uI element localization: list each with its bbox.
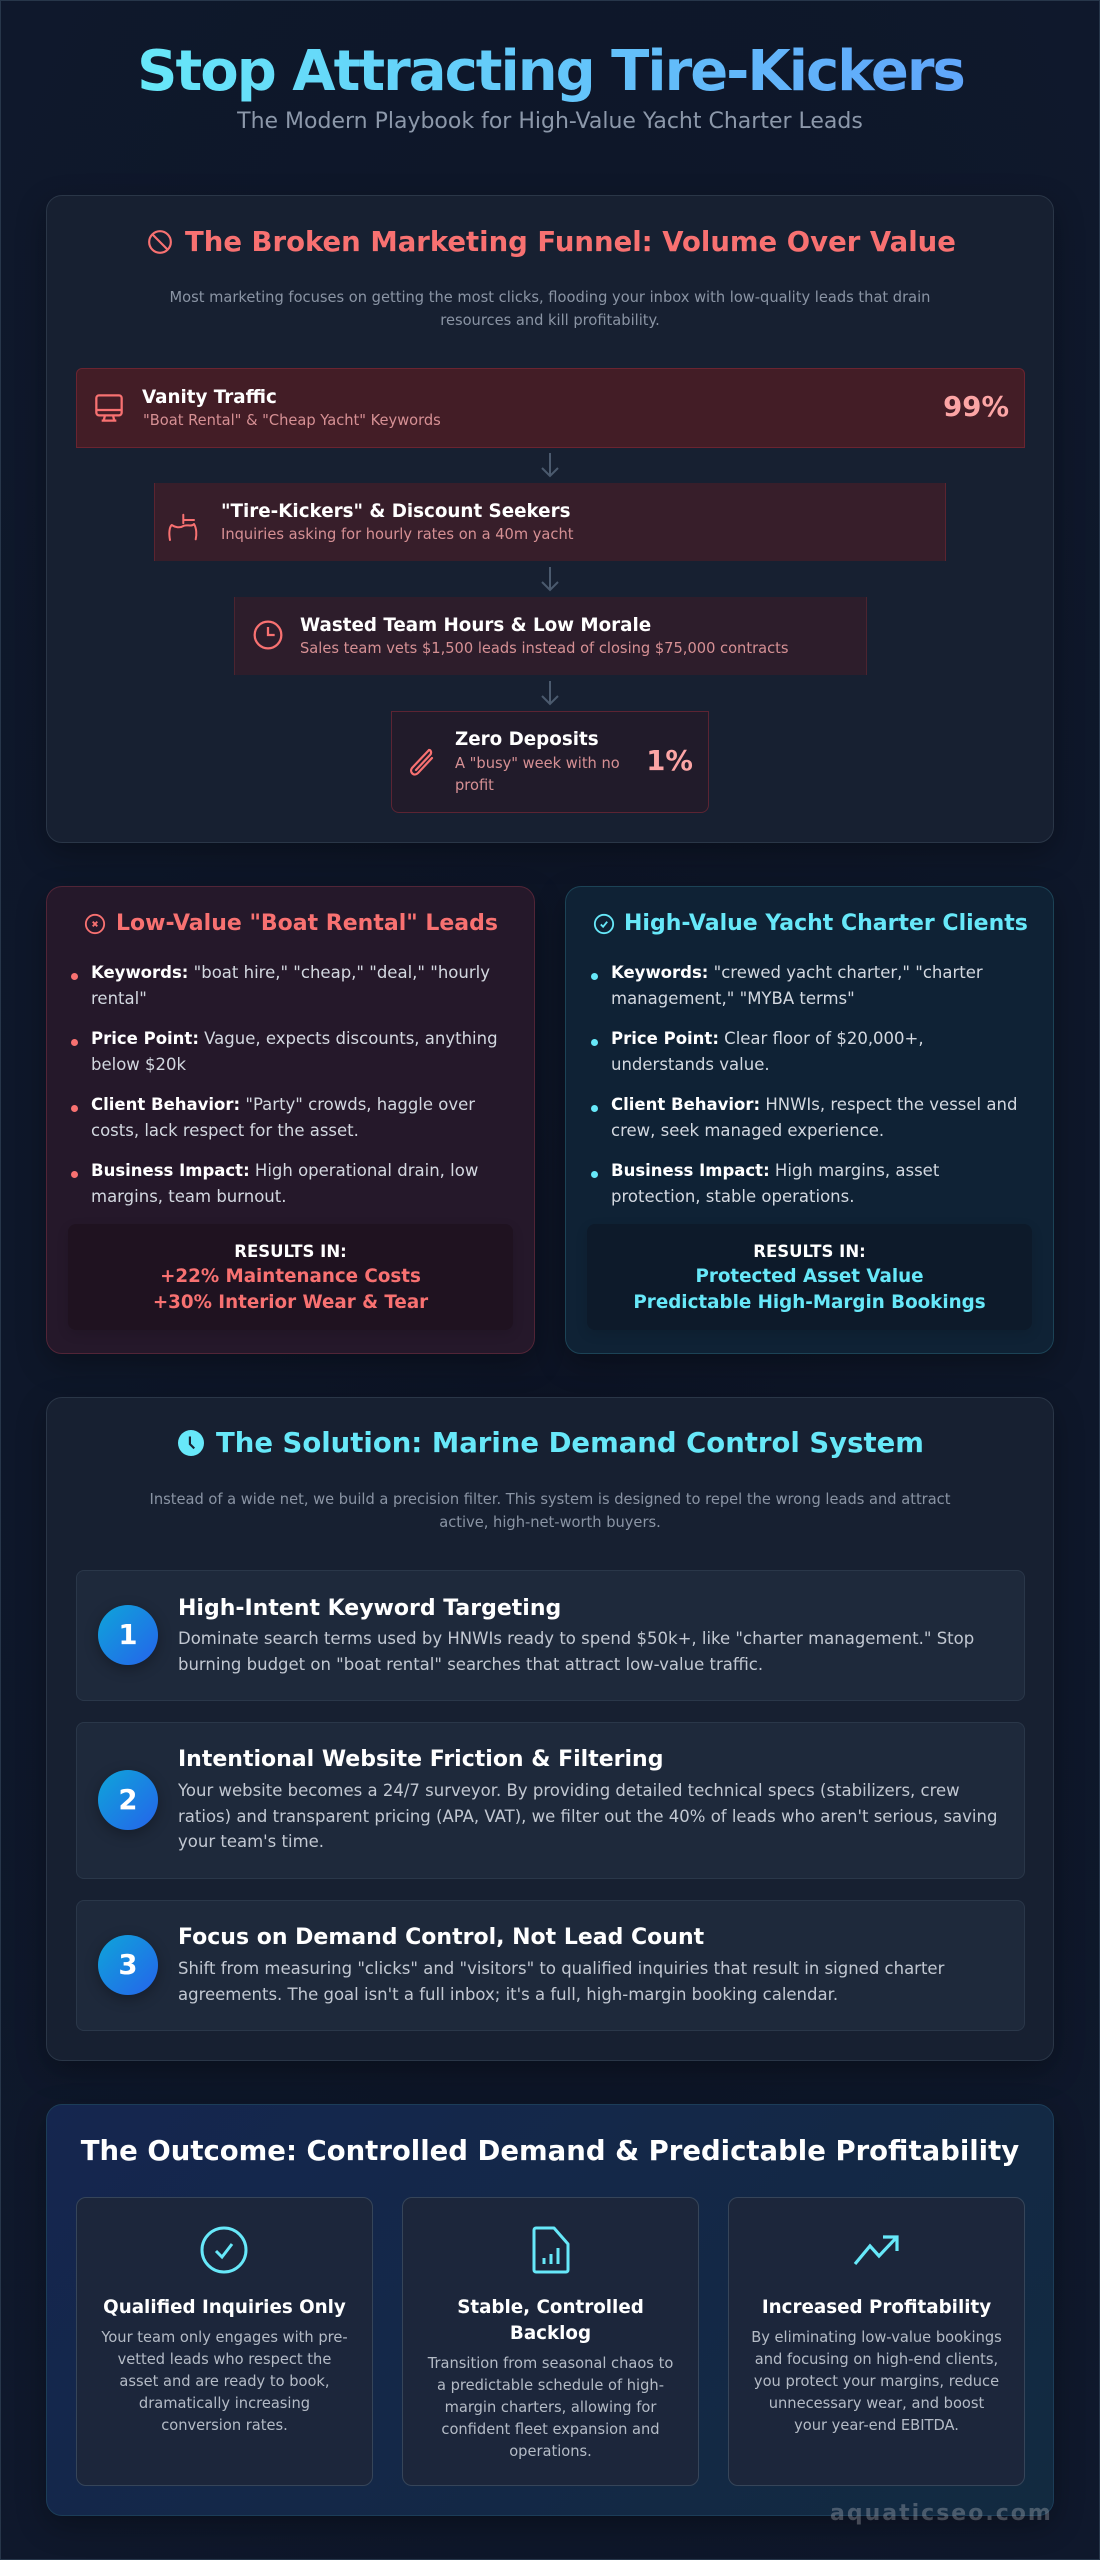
card body: conversion rates. bbox=[161, 2417, 288, 2434]
stage title: Wasted Team Hours & Low Morale bbox=[300, 615, 651, 636]
stage subtitle bbox=[455, 755, 620, 794]
item: keywords: rental" bbox=[91, 989, 147, 1008]
item: keywords bbox=[91, 963, 490, 1008]
item: keywords: Keywords: "boat hire," "cheap," "deal," "hourly bbox=[91, 963, 490, 982]
results values: +30% Interior Wear & Tear bbox=[153, 1292, 428, 1313]
stage subtitle: "Boat Rental" & "Cheap Yacht" Keywords bbox=[143, 412, 441, 429]
item: keywords: management," "MYBA terms" bbox=[611, 989, 855, 1008]
step 2 bbox=[76, 1722, 1025, 1879]
icon: trending up bbox=[854, 2235, 899, 2265]
stage metric: 1% bbox=[646, 745, 693, 777]
description: funnel bbox=[170, 289, 930, 328]
results label: RESULTS IN: bbox=[753, 1242, 866, 1261]
description: funnel: resources and kill profitability. bbox=[440, 312, 660, 328]
item: price point: below $20k bbox=[91, 1055, 186, 1074]
results box: low-value bbox=[68, 1224, 513, 1330]
card body: dramatically increasing bbox=[139, 2395, 310, 2412]
stage subtitle: Sales team vets $1,500 leads instead of closing $75,000 contracts bbox=[300, 640, 788, 657]
heading: low-value: Low-Value "Boat Rental" Leads bbox=[116, 911, 498, 936]
step 1 bbox=[76, 1570, 1025, 1701]
card body bbox=[428, 2355, 673, 2460]
number badge bbox=[98, 1770, 158, 1830]
number badge: 2 bbox=[118, 1784, 138, 1816]
heading: outcome: The Outcome: Controlled Demand & Predictable Profitability bbox=[81, 2135, 1019, 2167]
icon: monitor bbox=[95, 394, 123, 422]
icon: check circle bbox=[594, 914, 614, 934]
step body: burning budget on "boat rental" searches that attract low-value traffic. bbox=[178, 1655, 763, 1674]
stage title: Vanity Traffic bbox=[142, 387, 277, 408]
item: business impact bbox=[611, 1161, 939, 1206]
number badge bbox=[98, 1935, 158, 1995]
card title: Qualified Inquiries Only bbox=[103, 2297, 346, 2318]
bullet bbox=[591, 1105, 598, 1112]
stage title: Zero Deposits bbox=[455, 729, 599, 750]
card body: Transition from seasonal chaos to bbox=[428, 2355, 673, 2372]
step body bbox=[178, 1781, 997, 1851]
step body: Your website becomes a 24/7 surveyor. By providing detailed technical specs (stabilizers, crew bbox=[178, 1781, 960, 1800]
results values: +22% Maintenance Costs bbox=[160, 1266, 421, 1287]
card title: Backlog bbox=[510, 2323, 591, 2344]
item: keywords: Keywords: "crewed yacht charter," "charter bbox=[611, 963, 983, 982]
card body: margin charters, allowing for bbox=[445, 2399, 656, 2416]
step 3 bbox=[76, 1900, 1025, 2031]
icon: faucet bbox=[168, 514, 198, 541]
item: price point: understands value. bbox=[611, 1055, 770, 1074]
card body: operations. bbox=[509, 2443, 592, 2460]
heading: high-value: High-Value Yacht Charter Clients bbox=[624, 911, 1028, 936]
bullet bbox=[71, 1105, 78, 1112]
stage subtitle: A "busy" week with no bbox=[455, 755, 620, 772]
item: business impact bbox=[91, 1161, 478, 1206]
arrow bbox=[541, 567, 559, 592]
item: business impact: margins, team burnout. bbox=[91, 1187, 286, 1206]
item: client behavior bbox=[611, 1095, 1017, 1140]
funnel stage 2: tire-kickers bbox=[154, 483, 946, 561]
bullet bbox=[71, 1171, 78, 1178]
icon: ban bbox=[148, 230, 172, 254]
panel: high-value clients bbox=[565, 886, 1054, 1354]
card title bbox=[457, 2297, 644, 2344]
card body bbox=[101, 2329, 348, 2434]
stage subtitle: Inquiries asking for hourly rates on a 40m yacht bbox=[221, 526, 573, 543]
results label: RESULTS IN: bbox=[234, 1242, 347, 1261]
subtitle: The Modern Playbook for High-Value Yacht Charter Leads bbox=[237, 109, 863, 134]
item: price point: Price Point: Clear floor of $20,000+, bbox=[611, 1029, 924, 1048]
panel: low-value leads bbox=[46, 886, 535, 1354]
step body: agreements. The goal isn't a full inbox; it's a full, high-margin booking calendar. bbox=[178, 1985, 838, 2004]
icon: check circle bbox=[200, 2226, 248, 2274]
results values bbox=[153, 1266, 428, 1313]
panel: outcome bbox=[46, 2104, 1054, 2516]
card body bbox=[751, 2329, 1002, 2434]
item: client behavior: Client Behavior: "Party" crowds, haggle over bbox=[91, 1095, 475, 1114]
step title: High-Intent Keyword Targeting bbox=[178, 1596, 561, 1621]
card body: Your team only engages with pre- bbox=[101, 2329, 348, 2346]
step body bbox=[178, 1629, 974, 1674]
icon: x circle bbox=[84, 914, 106, 934]
step body bbox=[178, 1959, 944, 2004]
results box: high-value bbox=[587, 1224, 1032, 1330]
icon: paperclip bbox=[410, 748, 434, 776]
number badge: 3 bbox=[118, 1949, 138, 1981]
bullet bbox=[71, 1039, 78, 1046]
watermark: aquaticseo.com bbox=[830, 2501, 1053, 2526]
icon: document chart bbox=[532, 2226, 570, 2274]
arrow bbox=[541, 453, 559, 478]
card body: and focusing on high-end clients, bbox=[755, 2351, 998, 2368]
card body: confident fleet expansion and bbox=[441, 2421, 660, 2438]
item: price point bbox=[91, 1029, 498, 1074]
funnel stage 1: vanity traffic bbox=[76, 368, 1025, 448]
arrow bbox=[541, 681, 559, 706]
bullet bbox=[71, 973, 78, 980]
stage subtitle: profit bbox=[455, 777, 494, 794]
number badge: 1 bbox=[118, 1619, 138, 1651]
stage title: "Tire-Kickers" & Discount Seekers bbox=[221, 501, 570, 522]
description: solution: active, high-net-worth buyers. bbox=[439, 1514, 661, 1530]
item: client behavior bbox=[91, 1095, 476, 1140]
item: business impact: Business Impact: High operational drain, low bbox=[91, 1161, 478, 1180]
step body: Shift from measuring "clicks" and "visitors" to qualified inquiries that result in signed charter bbox=[178, 1959, 944, 1978]
item: price point bbox=[611, 1029, 924, 1074]
item: client behavior: crew, seek managed experience. bbox=[611, 1121, 884, 1140]
step body: Dominate search terms used by HNWIs ready to spend $50k+, like "charter management." Stop bbox=[178, 1629, 974, 1648]
card body: vetted leads who respect the bbox=[118, 2351, 331, 2368]
item: client behavior: Client Behavior: HNWIs, respect the vessel and bbox=[611, 1095, 1017, 1114]
funnel stage 4: zero deposits bbox=[391, 711, 709, 813]
step title: Intentional Website Friction & Filtering bbox=[178, 1747, 663, 1772]
bullet list: low-value bbox=[71, 963, 498, 1206]
bullet bbox=[591, 1171, 598, 1178]
heading: solution: The Solution: Marine Demand Control System bbox=[216, 1427, 924, 1459]
title: Stop Attracting Tire-Kickers bbox=[137, 39, 964, 104]
icon: filled clock bbox=[178, 1430, 204, 1456]
description: solution: Instead of a wide net, we build a precision filter. This system is designed to repel the wrong leads and attract bbox=[150, 1491, 950, 1508]
card title: Stable, Controlled bbox=[457, 2297, 644, 2318]
item: keywords bbox=[611, 963, 983, 1008]
bullet bbox=[591, 1039, 598, 1046]
item: client behavior: costs, lack respect for the asset. bbox=[91, 1121, 359, 1140]
card title: Increased Profitability bbox=[762, 2297, 991, 2318]
card body: asset and are ready to book, bbox=[119, 2373, 330, 2390]
item: business impact: Business Impact: High margins, asset bbox=[611, 1161, 939, 1180]
card body: a predictable schedule of high- bbox=[437, 2377, 664, 2394]
card: qualified inquiries bbox=[76, 2197, 373, 2486]
stage metric: 99% bbox=[943, 391, 1009, 423]
description: funnel: Most marketing focuses on getting the most clicks, flooding your inbox with low-quality leads that drain bbox=[170, 289, 930, 306]
bullet list: high-value bbox=[591, 963, 1017, 1206]
heading: broken funnel: The Broken Marketing Funnel: Volume Over Value bbox=[185, 226, 956, 258]
results values bbox=[633, 1266, 986, 1313]
item: business impact: protection, stable operations. bbox=[611, 1187, 854, 1206]
number badge bbox=[98, 1605, 158, 1665]
panel: broken marketing funnel bbox=[46, 195, 1054, 843]
card body: By eliminating low-value bookings bbox=[751, 2329, 1002, 2346]
icon: clock bbox=[254, 620, 282, 650]
results values: Predictable High-Margin Bookings bbox=[633, 1292, 986, 1313]
card: increased profitability bbox=[728, 2197, 1025, 2486]
description: solution bbox=[150, 1491, 950, 1530]
card: stable backlog bbox=[402, 2197, 699, 2486]
step body: ratios) and transparent pricing (APA, VAT), we filter out the 40% of leads who aren't serious, saving bbox=[178, 1807, 997, 1826]
panel: solution bbox=[46, 1397, 1054, 2061]
card body: your year-end EBITDA. bbox=[794, 2417, 959, 2434]
card body: unnecessary wear, and boost bbox=[769, 2395, 984, 2412]
step title: Focus on Demand Control, Not Lead Count bbox=[178, 1925, 704, 1950]
item: price point: Price Point: Vague, expects discounts, anything bbox=[91, 1029, 498, 1048]
bullet bbox=[591, 973, 598, 980]
results values: Protected Asset Value bbox=[695, 1266, 924, 1287]
card body: you protect your margins, reduce bbox=[754, 2373, 999, 2390]
funnel stage 3: wasted hours bbox=[234, 597, 867, 675]
step body: your team's time. bbox=[178, 1832, 324, 1851]
